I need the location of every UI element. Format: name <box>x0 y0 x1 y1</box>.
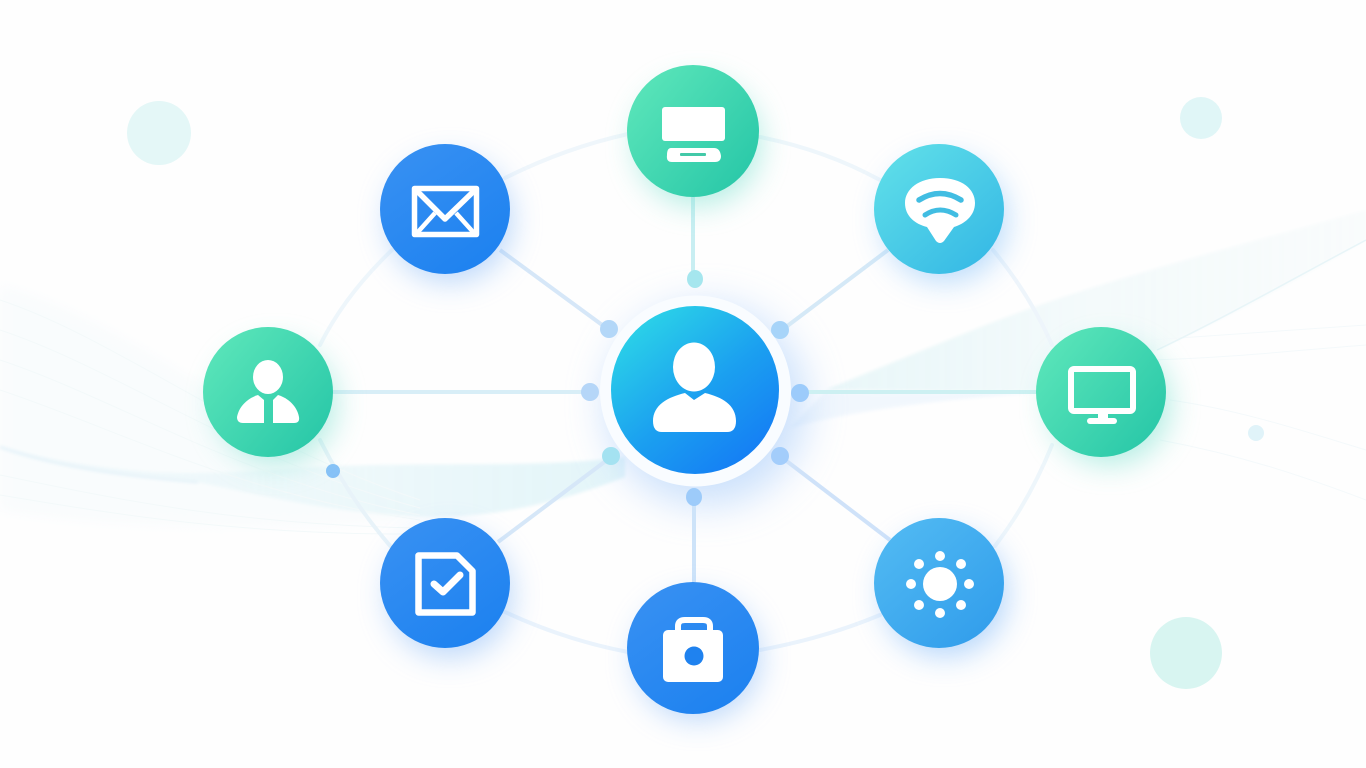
icon: lock <box>663 620 723 682</box>
center glow <box>606 305 806 505</box>
spoke: lower left <box>498 447 620 542</box>
small node dot <box>326 464 340 478</box>
spoke: top <box>687 197 703 288</box>
node: left person <box>203 327 336 464</box>
icon: sun <box>906 551 974 618</box>
icon: central person <box>653 342 736 432</box>
icon: wifi pin <box>905 178 975 243</box>
node: document <box>380 518 512 657</box>
background wave: left <box>0 285 625 534</box>
central hub <box>600 296 791 486</box>
node: wifi <box>874 144 1007 282</box>
node: mail <box>380 144 512 282</box>
spoke: upper right <box>771 250 888 339</box>
node: top monitor <box>627 65 760 205</box>
spoke: left <box>333 383 599 401</box>
spokes <box>333 197 1036 582</box>
spoke: right <box>791 384 1036 402</box>
node: lock <box>627 582 760 720</box>
outer ring connecting satellites <box>320 134 1052 652</box>
node: sun <box>874 518 1007 656</box>
icon: envelope <box>414 188 476 234</box>
icon: desktop computer <box>662 107 725 162</box>
spoke: upper left <box>500 250 618 338</box>
node: right monitor <box>1036 327 1170 464</box>
icon: person <box>237 360 299 423</box>
icon: checked document <box>418 556 472 612</box>
background wave: right <box>790 210 1366 500</box>
spoke: lower right <box>771 447 890 540</box>
decorative circles <box>127 97 1264 689</box>
icon: monitor <box>1071 369 1133 424</box>
spoke: bottom <box>686 488 702 582</box>
